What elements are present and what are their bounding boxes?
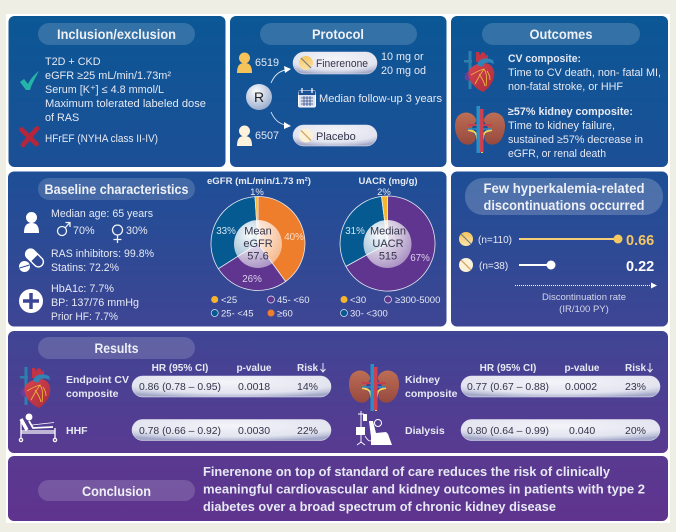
heading: hyperkalemia: Few hyperkalemia-related	[484, 181, 644, 196]
count: 6519: 6519	[255, 57, 279, 69]
heading: outcomes: Outcomes	[530, 27, 592, 42]
medication: Statins: 72.2%	[51, 262, 119, 274]
inclusion criteria	[45, 56, 206, 124]
column headers left: Risk	[297, 363, 319, 374]
label: kidney composite: Kidney	[405, 374, 440, 386]
pie chart: eGFR: 40%	[284, 232, 304, 243]
row: kidney composite	[461, 376, 660, 397]
row: kidney composite: 0.0002	[565, 381, 597, 393]
row: CV composite	[132, 376, 331, 397]
dose: 10 mg or	[381, 51, 424, 63]
row: CV composite: 0.0018	[238, 381, 270, 393]
label: kidney composite: composite	[405, 388, 458, 400]
bar: finerenone 0.66: 0.66	[626, 233, 654, 249]
pie chart: eGFR: 1%	[250, 187, 264, 198]
column headers left	[152, 363, 326, 374]
heading: conclusion: Conclusion	[82, 484, 151, 499]
pie chart: UACR: 67%	[410, 253, 430, 264]
bar: finerenone 0.66: (n=110)	[478, 235, 512, 246]
bar: finerenone 0.66	[459, 232, 654, 249]
icon: hospital bed	[19, 414, 57, 442]
icon: finerenone participants	[237, 52, 252, 73]
row: HHF: 0.78 (0.66 – 0.92)	[139, 425, 221, 437]
heading: results: Results	[94, 341, 138, 356]
female share: 30%	[126, 225, 148, 237]
legend: UACR: <30	[350, 295, 366, 306]
heading: hyperkalemia	[484, 181, 644, 213]
heading: eGFR chart: eGFR (mL/min/1.73 m²)	[207, 176, 311, 187]
dose	[381, 51, 426, 77]
conclusion text: diabetes over a broad spectrum of chronic kidney disease	[203, 499, 556, 514]
panel: outcomes	[451, 16, 668, 167]
row: HHF: 0.0030	[238, 425, 270, 437]
pie chart: UACR: Median	[370, 226, 406, 238]
inclusion criteria: T2D + CKD	[45, 56, 101, 68]
icon: calendar	[298, 88, 316, 107]
follow-up: Median follow-up 3 years	[319, 93, 443, 105]
row: CV composite: 0.86 (0.78 – 0.95)	[139, 381, 221, 393]
pie chart: UACR: 515	[379, 250, 397, 262]
arrow: discontinuation axis	[515, 282, 657, 288]
icon: kidneys	[455, 106, 505, 153]
clinical values: BP: 137/76 mmHg	[51, 297, 139, 309]
icon: red cross	[22, 128, 37, 145]
medication	[51, 248, 154, 274]
dose: 20 mg od	[381, 65, 426, 77]
label: endpoint CV composite: composite	[66, 388, 119, 400]
icon: heart	[464, 51, 494, 92]
conclusion text: Finerenone on top of standard of care reduces the risk of clinically	[203, 464, 611, 479]
label: kidney composite	[405, 374, 458, 400]
heading: baseline characteristics: Baseline characteristics	[44, 182, 188, 197]
placebo pill	[293, 125, 377, 146]
exclusion criterion: HFrEF (NYHA class II-IV)	[45, 133, 158, 145]
row: dialysis	[461, 420, 660, 440]
finerenone pill: Finerenone	[316, 58, 368, 70]
icon: person	[24, 212, 39, 233]
median age: Median age: 65 years	[51, 208, 154, 220]
inclusion criteria: eGFR ≥25 mL/min/1.73m²	[45, 70, 171, 82]
column headers right: Risk	[625, 363, 647, 374]
legend: eGFR: 25- <45	[221, 308, 254, 320]
arrow: to finerenone	[271, 66, 291, 83]
bar: placebo 0.22: 0.22	[626, 259, 654, 275]
inclusion criteria: of RAS	[45, 112, 79, 124]
panel: conclusion	[8, 456, 668, 521]
pie chart: eGFR: 33%	[216, 226, 236, 237]
panel: protocol	[230, 16, 446, 167]
bar: placebo 0.22: (n=38)	[479, 261, 508, 272]
row: CV composite: 14%	[297, 381, 318, 393]
pie chart: UACR	[340, 187, 435, 291]
conclusion text: meaningful cardiovascular and kidney outcomes in patients with type 2	[203, 482, 645, 496]
row: kidney composite: 23%	[625, 381, 646, 393]
heading: inclusion/exclusion: Inclusion/exclusion	[57, 27, 176, 42]
randomisation circle: R	[254, 89, 264, 105]
pie chart: eGFR: eGFR	[243, 238, 273, 250]
column headers left: HR (95% CI)	[152, 363, 208, 374]
clinical values	[51, 283, 139, 323]
panel: results	[8, 331, 668, 453]
pie chart: eGFR: 57.6	[247, 250, 269, 262]
inclusion criteria: Maximum tolerated labeled dose	[45, 98, 206, 110]
bar: placebo 0.22	[459, 258, 654, 275]
row: dialysis: 20%	[625, 425, 646, 437]
legend: UACR: ≥300-5000	[395, 295, 440, 306]
column headers right: HR (95% CI)	[480, 363, 536, 374]
row: dialysis: 0.040	[569, 425, 595, 437]
legend: UACR	[340, 295, 440, 320]
legend: UACR: 30- <300	[350, 308, 388, 320]
male share: 70%	[73, 225, 95, 237]
label: dialysis: Dialysis	[405, 425, 445, 437]
icon: heart	[20, 367, 50, 408]
kidney composite: Time to kidney failure,	[508, 120, 615, 132]
label: endpoint CV composite	[66, 374, 129, 400]
kidney composite: eGFR, or renal death	[508, 148, 606, 160]
clinical values: Prior HF: 7.7%	[51, 311, 118, 323]
pie chart: eGFR: Mean	[244, 226, 272, 238]
legend: eGFR: 45- <60	[277, 295, 310, 306]
heading: protocol: Protocol	[312, 27, 364, 42]
icon: male	[58, 222, 70, 236]
heading: UACR chart: UACR (mg/g)	[358, 176, 418, 187]
placebo pill: Placebo	[316, 131, 356, 143]
kidney composite: sustained ≥57% decrease in	[508, 134, 643, 146]
axis label: (IR/100 PY)	[559, 304, 609, 315]
panel: inclusion/exclusion	[8, 16, 226, 167]
CV composite: non-fatal stroke, or HHF	[508, 81, 623, 93]
icon: pills	[19, 247, 45, 272]
panel: baseline characteristics	[8, 172, 446, 326]
icon: placebo participants	[237, 126, 252, 146]
row: HHF	[132, 420, 331, 440]
count: 6507: 6507	[255, 130, 279, 142]
column headers left: p-value	[236, 363, 272, 374]
label: HHF: HHF	[66, 425, 88, 437]
kidney composite: ≥57% kidney composite:	[508, 106, 633, 118]
pie chart: UACR: 2%	[377, 187, 391, 198]
finerenone pill	[293, 52, 377, 74]
medication: RAS inhibitors: 99.8%	[51, 248, 154, 260]
row: kidney composite: 0.77 (0.67 – 0.88)	[467, 381, 549, 393]
legend: eGFR	[211, 295, 310, 320]
panel: hyperkalemia discontinuations	[451, 172, 668, 326]
CV composite: Time to CV death, non- fatal MI,	[508, 67, 661, 79]
clinical values: HbA1c: 7.7%	[51, 283, 114, 295]
inclusion criteria: Serum [K⁺] ≤ 4.8 mmol/L	[45, 84, 164, 96]
axis label: Discontinuation rate	[542, 292, 626, 303]
conclusion text	[203, 464, 645, 514]
arrow: to placebo	[271, 112, 291, 129]
CV composite	[508, 53, 661, 93]
label: endpoint CV composite: Endpoint CV	[66, 374, 129, 386]
icon: medical plus	[19, 289, 43, 313]
legend: eGFR: <25	[221, 295, 237, 306]
pie chart: eGFR	[211, 187, 305, 290]
randomisation circle	[246, 84, 272, 110]
row: dialysis: 0.80 (0.64 – 0.99)	[467, 425, 549, 437]
icon: check mark	[20, 71, 39, 90]
pie chart: eGFR: 26%	[242, 274, 262, 285]
legend: eGFR: ≥60	[277, 308, 293, 320]
pie chart: UACR: 31%	[345, 226, 365, 237]
heading: hyperkalemia: discontinuations occurred	[484, 198, 644, 213]
icon: female	[112, 225, 122, 243]
kidney composite	[508, 106, 643, 160]
column headers right	[480, 363, 652, 374]
axis label	[542, 292, 626, 315]
icon: kidneys	[349, 364, 399, 411]
CV composite: CV composite:	[508, 53, 581, 65]
column headers right: p-value	[564, 363, 600, 374]
icon: dialysis	[356, 411, 392, 445]
pie chart: UACR: UACR	[372, 238, 404, 250]
row: HHF: 22%	[297, 425, 318, 437]
